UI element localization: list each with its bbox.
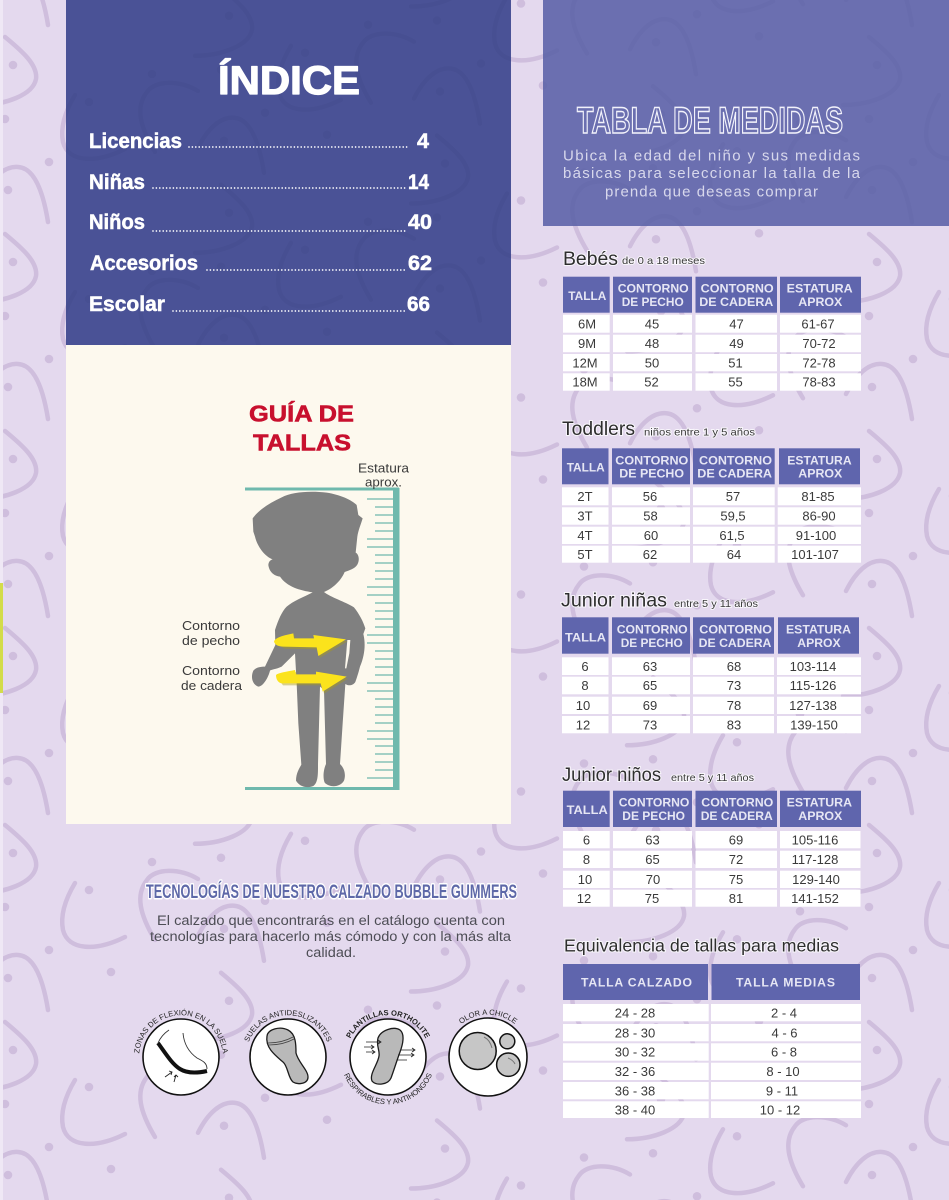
index row: accesorios [90, 252, 432, 275]
label: contorno de cadera: de cadera [181, 678, 243, 693]
intro text: prenda que deseas comprar [605, 184, 818, 201]
table rows: 101-107 [791, 547, 839, 562]
index row: escolar [89, 293, 430, 316]
table header: APROX [797, 636, 841, 650]
table rows: 49 [729, 336, 744, 351]
table header: ESTATURA [787, 796, 852, 810]
table rows [563, 831, 860, 907]
table rows: 69 [643, 698, 657, 713]
table header [562, 617, 859, 654]
table rows: 2 - 4 [771, 1005, 797, 1020]
table rows [563, 1004, 861, 1118]
index row: niñas: Niñas [89, 171, 145, 194]
index row: licencias: 4 [417, 130, 429, 153]
arrow: chest [274, 633, 347, 658]
arrow: hip [276, 670, 348, 694]
table rows: 45 [645, 316, 659, 331]
table rows: 63 [643, 659, 657, 674]
table rows: 6 [581, 659, 589, 674]
label: contorno de cadera [181, 663, 243, 693]
table rows: 115-126 [790, 678, 836, 693]
index row: niños [89, 211, 432, 234]
section: tecnologías [134, 879, 528, 1104]
table title: junior niñas [561, 591, 758, 612]
height ruler [245, 488, 400, 790]
panel: guía de tallas [66, 345, 511, 824]
table header: TALLA [567, 461, 605, 475]
table rows: 61-67 [801, 316, 835, 331]
table header: CONTORNO [617, 623, 688, 637]
table rows: 52 [644, 375, 659, 390]
table header: APROX [798, 809, 843, 823]
table title: junior niños [562, 765, 754, 786]
table rows: 50 [645, 355, 659, 370]
intro text: básicas para seleccionar la talla de la [563, 165, 861, 182]
table rows: 59,5 [720, 509, 746, 524]
icon: plantillas ortholite: PLANTILLAS ORTHOLITE [346, 1010, 430, 1038]
icon: suelas antideslizantes [244, 1010, 332, 1096]
table rows: 9M [578, 336, 596, 351]
table rows: 6M [578, 316, 596, 331]
table rows: 73 [727, 678, 741, 693]
table rows: 8 [581, 678, 589, 693]
index row: niñas: 14 [408, 171, 429, 194]
table rows: 75 [729, 872, 743, 887]
table header: CONTORNO [618, 282, 689, 296]
table header: TALLA CALZADO [581, 976, 692, 990]
table rows: 55 [728, 375, 743, 390]
table rows: 75 [645, 891, 659, 906]
table rows: 65 [643, 678, 657, 693]
table rows: 4T [577, 528, 593, 543]
table rows: 12 [576, 717, 590, 732]
table header: ESTATURA [787, 282, 853, 296]
table rows: 47 [729, 316, 744, 331]
index row: escolar: Escolar [89, 293, 165, 316]
table header: DE PECHO [621, 636, 683, 650]
label: estatura aprox: aprox. [365, 475, 402, 490]
table rows: 51 [728, 355, 743, 370]
table rows: 103-114 [790, 659, 836, 674]
table header: APROX [798, 467, 843, 481]
heading: guía de tallas: GUÍA DE [249, 400, 354, 427]
index row: licencias [89, 130, 429, 153]
intro text [563, 148, 861, 201]
table header [563, 964, 860, 1000]
icon: olor a chicle: OLOR A CHICLE [459, 1010, 518, 1024]
table header: ESTATURA [787, 453, 852, 467]
table header: DE CADERA [701, 809, 773, 823]
table rows: 72-78 [802, 355, 836, 370]
table rows [563, 315, 861, 391]
label: contorno de pecho: Contorno [182, 618, 240, 633]
table header [563, 791, 861, 827]
table rows: 78-83 [802, 375, 836, 390]
table rows: 72 [729, 852, 743, 867]
table rows: 18M [572, 375, 598, 390]
table header: DE PECHO [619, 467, 684, 481]
table rows: 81 [729, 891, 743, 906]
label: contorno de pecho: de pecho [182, 633, 240, 648]
table title: toddlers: niños entre 1 y 5 años [644, 427, 755, 439]
table header: CONTORNO [619, 796, 689, 810]
table rows: 70-72 [802, 336, 836, 351]
label: estatura aprox: Estatura [358, 461, 410, 476]
table rows: 9 - 11 [766, 1083, 798, 1098]
index row: accesorios: 62 [408, 252, 432, 275]
icon: suelas antideslizantes: SUELAS ANTIDESLIZANTES [244, 1010, 332, 1042]
table rows: 10 [576, 698, 590, 713]
table title: junior niñas: entre 5 y 11 años [674, 598, 758, 610]
table header: TALLA [568, 289, 606, 303]
table rows: 127-138 [789, 698, 837, 713]
table header: CONTORNO [701, 282, 774, 296]
table header: DE CADERA [699, 636, 772, 650]
table rows: 10 - 12 [760, 1102, 800, 1117]
index row: accesorios: Accesorios [90, 252, 198, 275]
table rows: 12M [572, 355, 598, 370]
table title: toddlers: Toddlers [562, 419, 635, 440]
table: bebés [563, 249, 861, 391]
table rows: 139-150 [790, 717, 838, 732]
heading: tabla de medidas: TABLA DE MEDIDAS [577, 100, 843, 141]
table header: CONTORNO [699, 453, 772, 467]
table rows: 63 [645, 832, 660, 847]
table rows: 4 - 6 [771, 1025, 798, 1040]
icon: zonas de flexión en la suela: ZONAS DE FLEXIÓN EN LA SUELA [134, 1008, 228, 1054]
icon: plantillas ortholite: RESPIRABLES Y ANTIHONGOS [344, 1073, 432, 1104]
paragraph: El calzado que encontrarás en el catálogo cuenta con [157, 913, 505, 928]
table title: junior niños: Junior niños [562, 765, 661, 786]
table: junior niños [562, 765, 861, 907]
table rows: 8 - 10 [766, 1064, 800, 1079]
index row: licencias: Licencias [89, 130, 182, 153]
table rows: 78 [727, 698, 741, 713]
table rows: 32 - 36 [615, 1064, 655, 1079]
table rows: 73 [643, 717, 657, 732]
index row: escolar: 66 [407, 293, 430, 316]
table rows: 5T [577, 547, 593, 562]
table title: equivalencia: Equivalencia de tallas para medias [564, 936, 839, 956]
table title: junior niños: entre 5 y 11 años [671, 772, 754, 784]
heading: guía de tallas [249, 400, 354, 456]
table title: bebés: Bebés [563, 249, 618, 270]
panel: índice [66, 0, 511, 345]
table rows: 56 [643, 489, 657, 504]
table title: junior niñas: Junior niñas [561, 591, 667, 612]
table rows: 57 [726, 489, 740, 504]
paragraph: tecnologías para hacerlo más cómodo y con la más alta [150, 929, 512, 944]
table rows: 8 [583, 852, 590, 867]
table: toddlers [562, 419, 861, 563]
icon: plantillas ortholite [344, 1010, 432, 1104]
table header: TALLA [565, 630, 606, 644]
table header: DE PECHO [622, 295, 684, 309]
table rows: 69 [729, 832, 743, 847]
table: junior niñas [561, 591, 861, 733]
table rows: 58 [643, 509, 658, 524]
table header: DE PECHO [622, 809, 685, 823]
table rows: 141-152 [791, 891, 839, 906]
intro text: Ubica la edad del niño y sus medidas [563, 148, 860, 165]
table header: DE CADERA [699, 295, 774, 309]
panel: tabla de medidas [543, 0, 949, 226]
table header: TALLA MEDIAS [736, 976, 835, 990]
heading: tecnologías: TECNOLOGÍAS DE NUESTRO CALZADO BUBBLE GUMMERS [146, 880, 517, 903]
table rows: 129-140 [792, 872, 840, 887]
table rows [562, 657, 861, 733]
table rows: 48 [645, 336, 659, 351]
table rows: 105-116 [792, 832, 838, 847]
table rows: 30 - 32 [615, 1045, 655, 1060]
label: contorno de cadera: Contorno [182, 663, 240, 678]
table title: toddlers [562, 419, 755, 440]
icon: zonas de flexión en la suela [134, 1008, 228, 1096]
table rows: 10 [578, 872, 592, 887]
table rows: 60 [644, 528, 658, 543]
table header [563, 277, 861, 313]
table rows: 64 [727, 547, 741, 562]
table rows: 62 [643, 547, 657, 562]
table header: TALLA [567, 803, 608, 817]
table title: bebés: de 0 a 18 meses [622, 255, 705, 267]
table rows: 12 [577, 891, 591, 906]
icon: olor a chicle [448, 1010, 528, 1097]
table header: DE CADERA [697, 467, 772, 481]
heading: guía de tallas: TALLAS [253, 430, 351, 456]
table rows: 83 [727, 717, 741, 732]
paragraph: calidad. [306, 945, 356, 960]
table rows: 24 - 28 [615, 1005, 655, 1020]
table rows: 91-100 [796, 528, 836, 543]
index row: niños: 40 [408, 211, 432, 234]
index row: niñas [89, 171, 429, 194]
table header: CONTORNO [615, 453, 688, 467]
table rows: 2T [577, 489, 593, 504]
table rows: 6 [583, 832, 590, 847]
table rows: 81-85 [801, 489, 835, 504]
table rows: 3T [577, 509, 593, 524]
table: equivalencia de tallas para medias [563, 936, 861, 1118]
label: contorno de pecho [182, 618, 240, 648]
table rows: 38 - 40 [615, 1102, 655, 1117]
table header [562, 448, 860, 484]
table rows: 36 - 38 [615, 1083, 655, 1098]
table rows: 117-128 [792, 852, 838, 867]
table rows: 68 [727, 659, 741, 674]
table rows: 65 [645, 852, 660, 867]
child silhouette [252, 492, 365, 787]
table rows: 86-90 [802, 509, 836, 524]
paragraph [150, 913, 512, 960]
heading: índice: ÍNDICE [218, 58, 360, 103]
index row: niños: Niños [89, 211, 145, 234]
table title: bebés [563, 249, 705, 270]
table header: CONTORNO [701, 796, 773, 810]
table rows: 28 - 30 [615, 1025, 655, 1040]
table rows: 70 [646, 872, 660, 887]
table header: ESTATURA [786, 623, 851, 637]
table rows: 61,5 [719, 528, 745, 543]
table header: APROX [798, 295, 843, 309]
table rows [562, 487, 861, 563]
table rows: 6 - 8 [771, 1045, 797, 1060]
label: estatura aprox [358, 461, 410, 490]
table header: CONTORNO [699, 623, 772, 637]
